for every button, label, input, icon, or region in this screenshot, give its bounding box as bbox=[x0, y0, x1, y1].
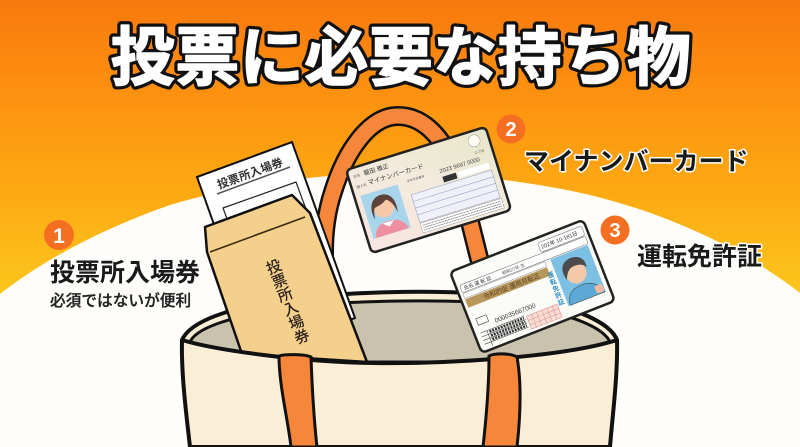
license stamp bbox=[594, 283, 605, 294]
bag rim and interior bbox=[182, 292, 617, 362]
title: 投票に必要な持ち物 bbox=[111, 22, 691, 94]
title: 投票に必要な持ち物 bbox=[111, 22, 691, 94]
bag handle (back strap) bbox=[324, 116, 482, 300]
tote bag body bbox=[182, 340, 617, 447]
badge 1 bbox=[44, 220, 74, 250]
badge 1: 1 bbox=[53, 225, 65, 248]
badge 3: 3 bbox=[609, 220, 621, 242]
card black code box bbox=[442, 173, 457, 183]
ticket heading: 投票所入場券 bbox=[215, 155, 285, 192]
driver's license card: 氏名 運 転 証 bbox=[463, 275, 492, 292]
My Number card: マイナンバーカード bbox=[367, 162, 425, 187]
card name rows: 氏名 bbox=[353, 172, 361, 179]
driver's license card: 202年 10-181日 bbox=[540, 229, 579, 251]
label 1: voting ticket: 投票所入場券 bbox=[50, 259, 200, 287]
label 3: driver's license: 運転免許証 bbox=[637, 243, 762, 271]
license side label: 運転免許証 bbox=[544, 269, 566, 308]
license details bbox=[475, 302, 530, 348]
driver's license card: 令和的促 運用月転正 bbox=[482, 271, 542, 301]
My Number card: C-718 bbox=[474, 148, 485, 155]
card seal mark bbox=[467, 133, 482, 148]
license date row bbox=[537, 226, 585, 252]
envelope label: 投票所入場券 bbox=[262, 257, 312, 348]
white dome background bbox=[0, 173, 800, 447]
card footer notes bbox=[420, 198, 504, 233]
My Number card bbox=[346, 127, 511, 253]
badge 3 bbox=[600, 216, 630, 244]
orange gradient background bbox=[0, 0, 800, 300]
front strap left bbox=[279, 355, 317, 447]
license number: 000035667000 bbox=[494, 302, 537, 325]
envelope bbox=[205, 195, 367, 362]
license gold band bbox=[463, 262, 547, 298]
driver's license card: 昭和27年 生 bbox=[501, 261, 526, 277]
license grid bbox=[526, 304, 562, 329]
front strap right bbox=[483, 354, 520, 447]
driver's license card bbox=[450, 220, 615, 353]
My Number card: 生年月日番号 bbox=[406, 173, 425, 183]
My Number card: 個人名 bbox=[356, 182, 368, 190]
license photo bbox=[550, 245, 606, 306]
label 2: My Number card: マイナンバーカード bbox=[524, 148, 749, 176]
card form lines bbox=[411, 170, 500, 223]
sublabel 1: 必須ではないが便利 bbox=[50, 291, 191, 310]
badge 2: 2 bbox=[505, 119, 517, 141]
My Number card: 2023 9697 0000 bbox=[439, 157, 481, 175]
badge 2 bbox=[496, 114, 526, 144]
card photo bbox=[360, 184, 411, 239]
voting admission ticket paper bbox=[197, 142, 355, 353]
license name row bbox=[460, 236, 588, 293]
My Number card: 籠田 雅正 bbox=[363, 162, 390, 177]
